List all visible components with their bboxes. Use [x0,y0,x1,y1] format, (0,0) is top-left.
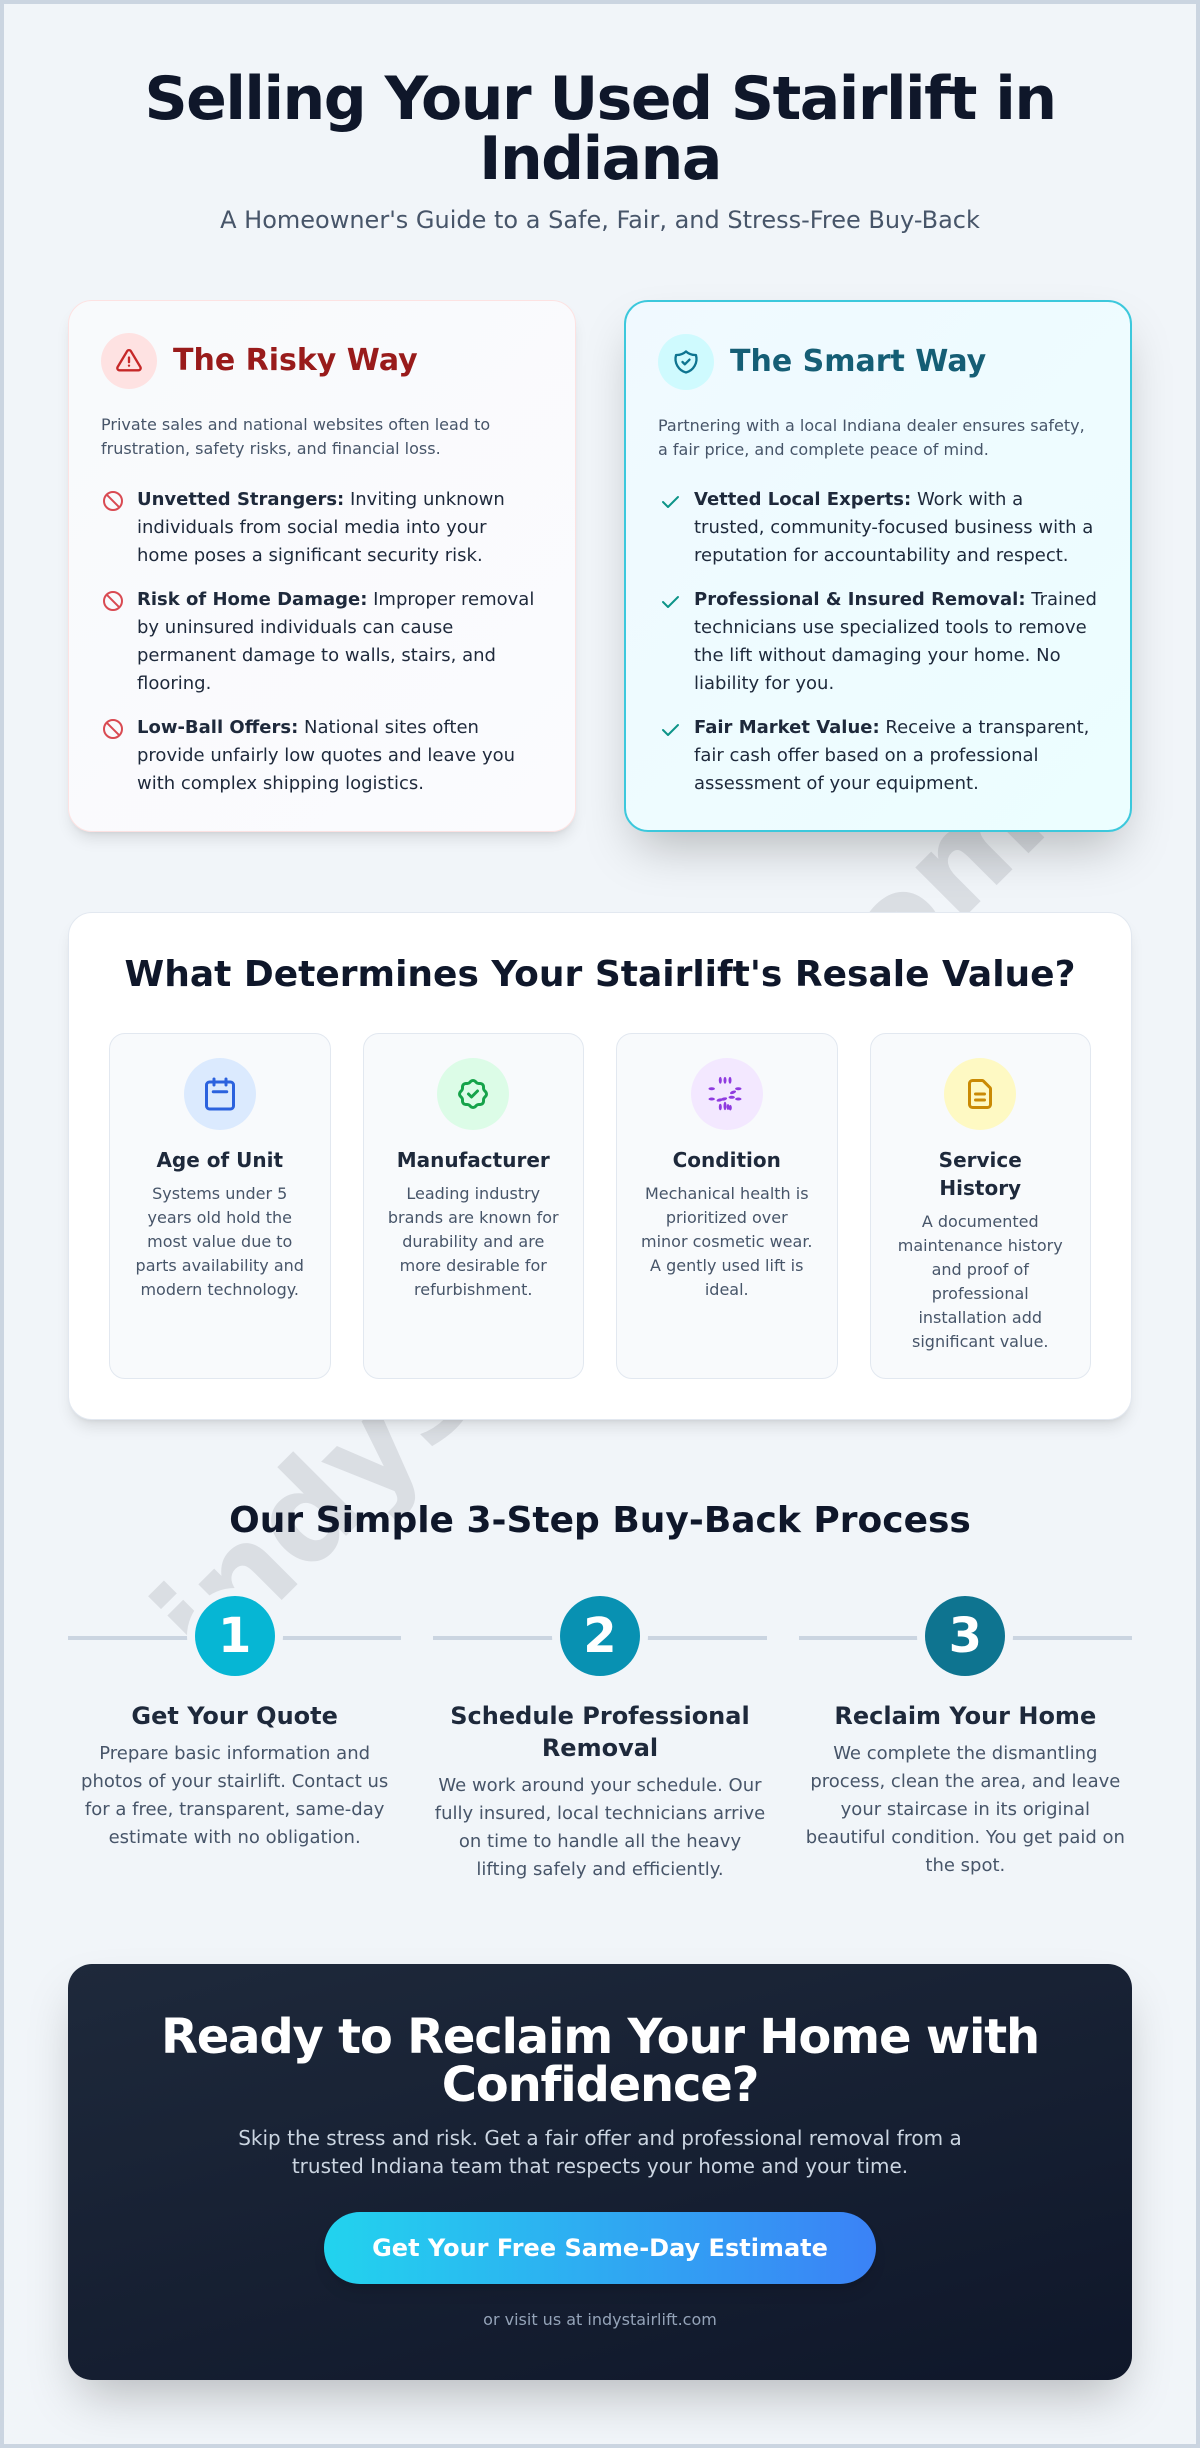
card: condition: Condition [673,1148,781,1172]
step 2 number [560,1596,640,1676]
cta button: Get Your Free Same-Day Estimate [372,2234,828,2262]
card: manufacturer: Leading industry brands are known for durability and are more desirable for refurbishment. [388,1184,559,1299]
step 3: We complete the dismantling process, clean the area, and leave your staircase in its original beautiful condition. You get paid on the spot. [806,1743,1125,1876]
card: age of unit [109,1033,330,1379]
risky list: Low-Ball Offers: National sites often provide unfairly low quotes and leave you with complex shipping logistics. [137,717,515,794]
value factor cards [109,1033,1091,1379]
card: service history: A documented maintenance history and proof of professional installation add significant value. [898,1212,1063,1351]
smart list: Vetted Local Experts: Work with a trusted, community-focused business with a reputation for accountability and respect. [694,489,1093,566]
smart list: Fair Market Value: Receive a transparent, fair cash offer based on a professional assessment of your equipment. [694,717,1089,794]
step 3: Reclaim Your Home [834,1702,1096,1730]
step 2 number: 2 [583,1608,617,1664]
risky intro: Private sales and national websites often lead to frustration, safety risks, and financial loss. [101,415,490,458]
panel: the smart way [624,300,1132,832]
website note: or visit us at indystairlift.com [483,2310,717,2329]
card: service history: Service [939,1148,1022,1172]
subtitle: A Homeowner's Guide to a Safe, Fair, and Stress-Free Buy-Back [220,206,980,234]
comparison panels [67,300,1147,872]
title: Selling Your Used Stairlift in Indiana [144,64,1056,194]
process steps [68,1588,1132,1880]
panel: resale value [68,912,1132,1420]
icon: rosette check [437,1058,509,1130]
icon: warning triangle [101,333,157,389]
card: condition [616,1033,838,1379]
icon: shield check [658,334,714,390]
step 3 number: 3 [949,1608,982,1664]
step 1 number [195,1596,275,1676]
smart heading [658,334,986,390]
step 2: We work around your schedule. Our fully insured, local technicians arrive on time to handle all the heavy lifting safely and efficiently. [435,1775,765,1880]
card: service history [870,1033,1091,1379]
card: manufacturer: Manufacturer [397,1148,550,1172]
panel: call to action [68,1964,1132,2380]
step 1: Get Your Quote [131,1702,338,1730]
smart intro: Partnering with a local Indiana dealer ensures safety, a fair price, and complete peace of mind. [658,416,1085,459]
value heading: What Determines Your Stairlift's Resale Value? [124,954,1075,995]
header [144,64,1056,234]
step 2 [433,1596,767,1880]
step 2: Schedule Professional Removal [450,1702,750,1762]
risky list [103,489,534,794]
icon: calendar [184,1058,256,1130]
step 3 number [925,1596,1005,1676]
cta text: Skip the stress and risk. Get a fair offer and professional removal from a trusted Indiana team that respects your home and your time. [238,2126,962,2178]
risky heading: The Risky Way [173,343,418,378]
smart list: Professional & Insured Removal: Trained technicians use specialized tools to remove the lift without damaging your home. No liability for you. [694,589,1097,694]
card: condition: Mechanical health is prioritized over minor cosmetic wear. A gently used lift is ideal. [641,1184,813,1299]
cta button [324,2212,876,2284]
panel: the risky way [68,300,576,832]
step 3 [799,1596,1132,1876]
card: service history: History [939,1176,1021,1200]
risky heading [101,333,418,389]
step 1 [68,1588,401,1848]
step 1: Prepare basic information and photos of your stairlift. Contact us for a free, transparent, same-day estimate with no obligation. [81,1743,388,1848]
step 1 number: 1 [218,1608,251,1664]
cta heading: Ready to Reclaim Your Home with Confidence? [161,2009,1039,2113]
icon: condition gauge dashes [691,1058,763,1130]
smart list [662,489,1097,794]
risky list: Unvetted Strangers: Inviting unknown individuals from social media into your home poses a significant security risk. [137,489,505,566]
card: manufacturer [362,1033,584,1379]
smart heading: The Smart Way [730,344,986,379]
card: age of unit: Systems under 5 years old hold the most value due to parts availability and modern technology. [136,1184,304,1299]
icon: document [944,1058,1016,1130]
process heading: Our Simple 3-Step Buy-Back Process [229,1500,971,1541]
risky list: Risk of Home Damage: Improper removal by uninsured individuals can cause permanent damage to walls, stairs, and flooring. [137,589,534,694]
watermark: indystairlift.com [126,747,1073,1694]
card: age of unit: Age of Unit [156,1148,283,1172]
